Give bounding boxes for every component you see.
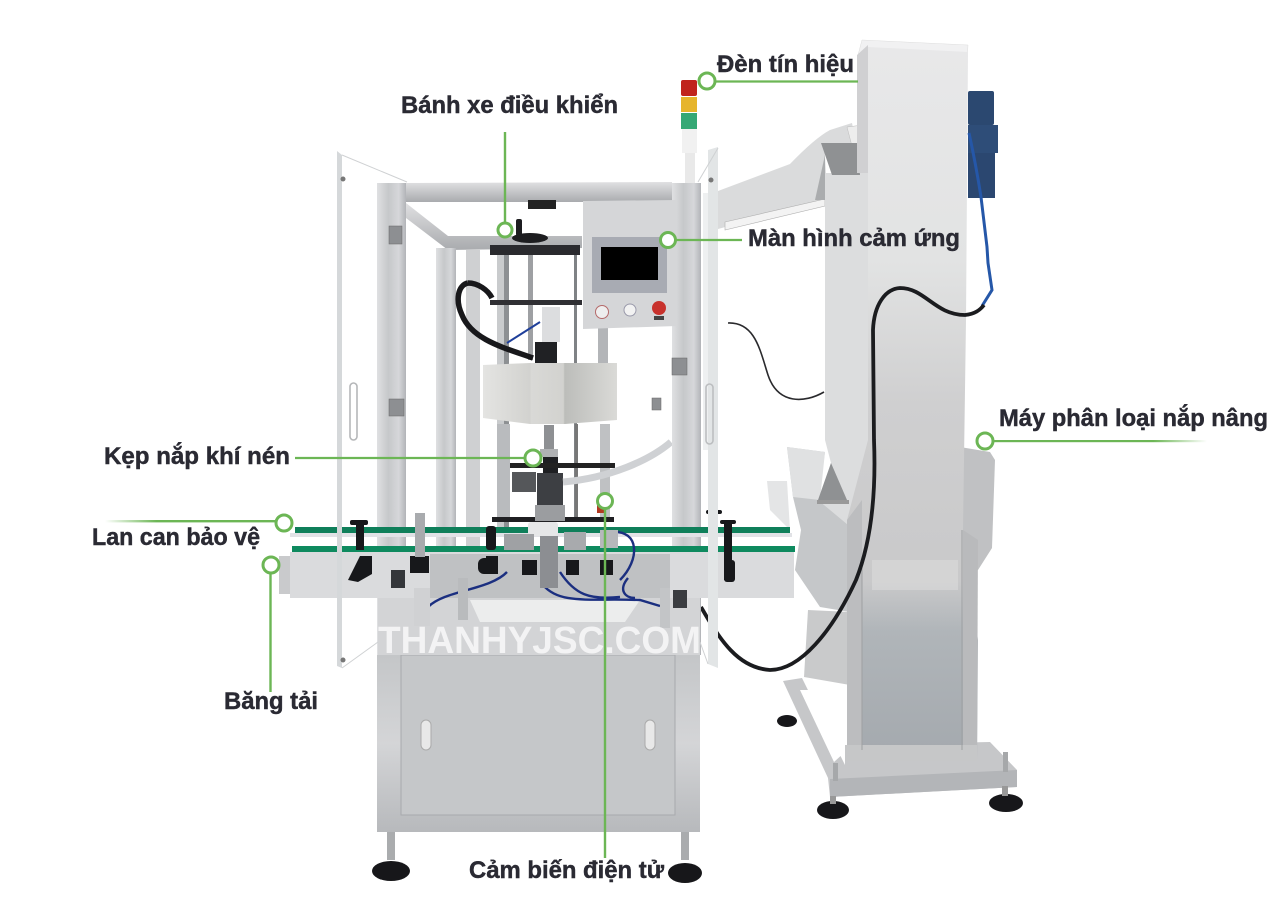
main frame right post bbox=[672, 183, 701, 655]
guide posts bbox=[414, 513, 670, 628]
lead screw assembly bbox=[490, 245, 608, 530]
motor wire bbox=[969, 133, 992, 306]
rear guard rail bbox=[290, 527, 792, 537]
callout: Băng tải bbox=[224, 557, 318, 715]
main frame left post bbox=[377, 183, 406, 655]
overhead cap chute bbox=[718, 123, 863, 230]
valve block bbox=[504, 505, 618, 588]
callout: Cảm biến điện tử bbox=[469, 494, 665, 884]
housing support shafts bbox=[497, 424, 610, 520]
blue motor bbox=[968, 91, 998, 198]
callout: Kẹp nắp khí nén bbox=[104, 442, 541, 470]
lifting cap sorter machine bbox=[701, 40, 1023, 819]
right transparent door bbox=[698, 147, 718, 668]
rear frame posts bbox=[406, 203, 582, 648]
thin cable bbox=[728, 323, 824, 399]
watermark: THANHYJSC.COM bbox=[378, 620, 701, 662]
signal tower bbox=[681, 80, 697, 183]
hinges bbox=[389, 226, 687, 416]
right hopper bbox=[960, 447, 995, 570]
tray reflection bbox=[470, 600, 640, 622]
callout: Bánh xe điều khiển: Bánh xe điều khiển bbox=[401, 92, 618, 119]
callout: Kẹp nắp khí nén: Kẹp nắp khí nén bbox=[104, 442, 290, 470]
control panel bbox=[583, 200, 677, 329]
black cable bbox=[701, 288, 984, 670]
callout: Băng tải: Băng tải bbox=[224, 688, 318, 715]
cabinet feet bbox=[372, 832, 702, 883]
callout: Màn hình cảm ứng: Màn hình cảm ứng bbox=[748, 225, 960, 252]
callout: Lan can bảo vệ bbox=[92, 515, 292, 551]
callout: Đèn tín hiệu bbox=[699, 51, 858, 89]
callout: Đèn tín hiệu: Đèn tín hiệu bbox=[717, 51, 854, 78]
elevator column bbox=[817, 40, 978, 761]
touch screen bbox=[592, 237, 667, 293]
top beam bbox=[406, 182, 672, 202]
top sensor block bbox=[528, 200, 556, 209]
left transparent door bbox=[337, 151, 407, 668]
callout: Máy phân loại nắp nâng: Máy phân loại nắp nâng bbox=[999, 404, 1268, 432]
capping machine bbox=[279, 80, 795, 883]
callout: Cảm biến điện tử: Cảm biến điện tử bbox=[469, 857, 665, 884]
front conveyor belt bbox=[292, 546, 795, 552]
sorter base frame bbox=[783, 678, 1017, 797]
sorter feet bbox=[777, 715, 1023, 819]
left hopper bbox=[767, 447, 850, 685]
control wheel bbox=[512, 219, 548, 243]
capping head housing bbox=[483, 363, 617, 424]
conveyor clamps bbox=[348, 510, 736, 608]
conveyor body bbox=[279, 552, 794, 598]
blue tube bbox=[507, 322, 540, 343]
callout: Bánh xe điều khiển bbox=[401, 92, 618, 237]
blue pneumatic hoses bbox=[428, 532, 660, 607]
pneumatic gripper bbox=[492, 425, 615, 522]
callout: Lan can bảo vệ: Lan can bảo vệ bbox=[92, 524, 260, 551]
panel buttons bbox=[596, 301, 666, 320]
lower cabinet bbox=[377, 655, 700, 832]
transparent tube bbox=[563, 442, 671, 482]
black hose bbox=[458, 283, 533, 358]
callout: Máy phân loại nắp nâng bbox=[977, 404, 1268, 449]
watermark band bbox=[378, 598, 700, 655]
